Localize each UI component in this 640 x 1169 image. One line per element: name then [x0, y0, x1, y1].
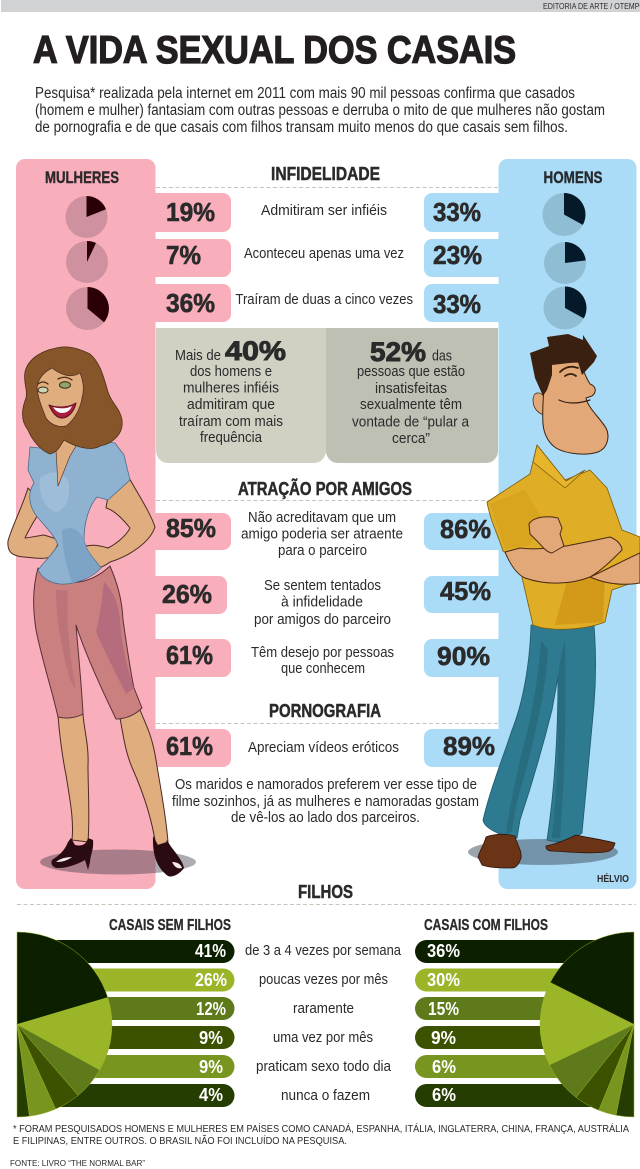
stat pills: homens — [424, 193, 504, 767]
heading: infidelidade: INFIDELIDADE — [271, 163, 380, 184]
panel: mulheres — [16, 159, 156, 889]
subheading: casais sem filhos: CASAIS SEM FILHOS — [109, 917, 231, 934]
hair back — [22, 347, 122, 454]
filhos labels: raramente — [293, 1000, 354, 1017]
shoes — [51, 836, 184, 877]
pie: homens 33% (2) — [544, 286, 586, 330]
pornografia stats: Apreciam vídeos eróticos — [248, 739, 399, 756]
infidelidade numbers — [166, 197, 482, 319]
shirt — [28, 440, 130, 584]
atração numbers: 90% — [437, 641, 490, 671]
signature: HÉLVIO — [597, 872, 629, 885]
face — [37, 368, 83, 427]
heading: pornografia: PORNOGRAFIA — [269, 700, 381, 721]
filhos labels: de 3 a 4 vezes por semana — [245, 942, 402, 959]
atração labels: que conhecem — [281, 660, 365, 677]
atração labels — [241, 509, 403, 677]
pornografia stats — [166, 731, 495, 761]
header bar — [1, 0, 640, 12]
atração numbers: 61% — [166, 640, 213, 670]
pie: mulheres 19% — [66, 196, 108, 238]
shirt — [487, 445, 640, 629]
callout: 40%: Mais de — [175, 347, 221, 364]
trousers — [34, 566, 142, 719]
callout: 40% — [156, 328, 326, 463]
filhos labels: praticam sexo todo dia — [256, 1058, 392, 1075]
jeans — [483, 625, 596, 842]
filhos labels: poucas vezes por mês — [259, 971, 388, 988]
callout: 52%: 52% — [370, 337, 426, 367]
callout: 52%: insatisfeitas — [375, 380, 447, 397]
filhos numbers: com filhos: 15% — [428, 999, 459, 1019]
illustration: woman — [8, 347, 196, 877]
pornografia stats: 61% — [166, 731, 213, 761]
atração numbers: 45% — [440, 576, 491, 606]
atração numbers: 86% — [440, 514, 491, 544]
atração labels: à infidelidade — [281, 594, 363, 610]
legs — [58, 710, 168, 846]
pornografia text: Os maridos e namorados preferem ver esse tipo de — [175, 776, 477, 793]
pornografia stats: 89% — [443, 731, 495, 761]
infidelidade numbers: 33% — [433, 197, 481, 227]
filhos numbers: sem filhos: 12% — [196, 999, 226, 1019]
intro text — [35, 85, 605, 136]
neck — [50, 423, 76, 486]
callout: 40%: frequência — [200, 429, 263, 446]
filhos numbers: com filhos: 6% — [432, 1085, 456, 1105]
pornografia text — [172, 776, 479, 826]
pie: homens 33% — [542, 193, 586, 236]
callout: 52%: das — [432, 348, 452, 364]
crossed arms — [505, 517, 640, 584]
atração labels: Não acreditavam que um — [248, 509, 396, 526]
infidelidade labels — [236, 202, 413, 308]
callout: 52%: vontade de “pular a — [352, 414, 470, 430]
callout: 40%: 40% — [225, 336, 286, 366]
filhos numbers: sem filhos: 9% — [199, 1057, 223, 1077]
bars: casais com filhos — [415, 940, 634, 1107]
footnote: E FILIPINAS, ENTRE OUTROS. O BRASIL NÃO FOI INCLUÍDO NA PESQUISA. — [13, 1134, 347, 1147]
atração labels: amigo poderia ser atraente — [241, 526, 403, 542]
hair — [530, 334, 597, 396]
panel: homens — [498, 159, 636, 889]
head — [543, 362, 608, 454]
shoes — [478, 834, 615, 868]
pie chart: casais com filhos — [540, 932, 634, 1117]
callout: 52%: sexualmente têm — [360, 396, 462, 413]
filhos numbers: sem filhos: 9% — [199, 1028, 223, 1048]
source: FONTE: LIVRO “THE NORMAL BAR” — [10, 1158, 145, 1168]
stat pills: mulheres — [150, 193, 231, 767]
filhos numbers: sem filhos: 26% — [195, 970, 227, 990]
callout: 40%: dos homens e — [190, 363, 272, 380]
pie: mulheres 7% — [66, 241, 108, 283]
filhos numbers: sem filhos — [195, 941, 227, 1105]
infidelidade labels: Admitiram ser infiéis — [261, 202, 387, 219]
ear — [533, 393, 545, 415]
filhos numbers: com filhos: 36% — [427, 941, 460, 961]
infidelidade numbers: 7% — [166, 240, 201, 270]
filhos numbers: com filhos: 30% — [427, 970, 460, 990]
filhos numbers: com filhos — [427, 941, 460, 1105]
callout: 40%: admitiram que — [187, 396, 275, 413]
infidelidade numbers: 33% — [433, 289, 481, 319]
atração numbers: 26% — [162, 579, 212, 609]
subheading: casais com filhos: CASAIS COM FILHOS — [424, 917, 548, 934]
filhos labels — [245, 942, 402, 1104]
filhos numbers: com filhos: 9% — [431, 1028, 456, 1048]
infidelidade labels: Aconteceu apenas uma vez — [244, 245, 404, 262]
callout: 52%: cerca” — [392, 430, 430, 447]
callout: 40%: mulheres infiéis — [183, 380, 279, 396]
filhos labels: nunca o fazem — [281, 1087, 370, 1104]
pie: mulheres 36% — [66, 287, 109, 330]
filhos numbers: sem filhos: 41% — [195, 941, 226, 961]
title: A VIDA SEXUAL DOS CASAIS — [33, 29, 516, 72]
filhos labels: uma vez por mês — [273, 1029, 373, 1046]
heading: mulheres: MULHERES — [45, 168, 119, 187]
atração labels: para o parceiro — [278, 542, 367, 559]
infidelidade numbers: 19% — [166, 197, 215, 227]
illustration: man — [468, 334, 640, 868]
bars: casais sem filhos — [17, 940, 234, 1107]
callout: 52%: pessoas que estão — [357, 363, 465, 380]
heading: homens: HOMENS — [544, 168, 602, 187]
footnote — [13, 1122, 629, 1147]
callout: 40%: traíram com mais — [179, 413, 283, 430]
pie chart: casais sem filhos — [17, 932, 112, 1117]
infidelidade labels: Traíram de duas a cinco vezes — [236, 291, 413, 308]
atração numbers: 85% — [166, 513, 216, 543]
filhos numbers: sem filhos: 4% — [199, 1085, 223, 1105]
infidelidade numbers: 23% — [433, 240, 482, 270]
pornografia text: filme sozinhos, já as mulheres e namoradas gostam — [172, 793, 479, 810]
pie: homens 23% — [544, 242, 586, 284]
infidelidade numbers: 36% — [166, 288, 215, 318]
callout: 52% — [326, 328, 498, 463]
atração labels: Se sentem tentados — [264, 577, 381, 594]
intro text: de pornografia e de que casais com filhos transam muito menos do que casais sem filhos. — [35, 119, 568, 136]
arms — [8, 476, 155, 569]
filhos numbers: com filhos: 6% — [432, 1057, 456, 1077]
atração numbers — [162, 513, 491, 671]
heading: filhos: FILHOS — [298, 881, 353, 902]
pornografia text: de vê-los ao lado dos parceiros. — [231, 809, 420, 826]
atração labels: Têm desejo por pessoas — [251, 644, 394, 661]
atração labels: por amigos do parceiro — [254, 611, 391, 628]
heading: atração por amigos: ATRAÇÃO POR AMIGOS — [238, 478, 412, 499]
eyes and mouth — [38, 377, 76, 418]
